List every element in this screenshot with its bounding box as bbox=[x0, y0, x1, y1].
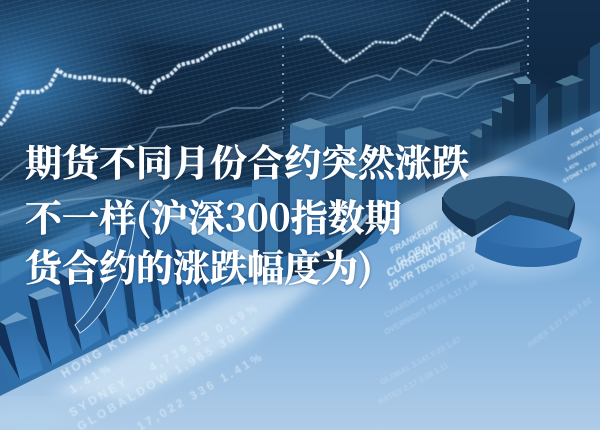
pie main top face bbox=[443, 176, 575, 220]
title line 2: 不一样(沪深300指数期 bbox=[25, 188, 402, 242]
floor ticker text: ASIA bbox=[570, 126, 584, 138]
floor ticker text: CHARDAYS RT.16 1.32 0.17 bbox=[383, 262, 477, 320]
floor ticker text: 1.41% bbox=[564, 161, 581, 174]
title bbox=[25, 133, 572, 292]
floor ticker text: 4,739 33 0.69% bbox=[146, 300, 262, 375]
pie chart bbox=[442, 176, 582, 267]
bar 7 bbox=[170, 233, 200, 303]
bar 6 bbox=[143, 222, 177, 315]
floor ticker text: OVERNIGHT RATE 5.17 1.00 bbox=[383, 278, 480, 337]
bar 0 bbox=[0, 350, 10, 393]
bar 4 bbox=[83, 233, 128, 337]
volume ticks band bbox=[0, 62, 520, 226]
floor ticker text: 10-YR TBOND 3.37 bbox=[386, 240, 469, 293]
floor ticker text: 1.41% bbox=[66, 360, 116, 397]
light floor plane bbox=[0, 111, 600, 430]
floor ticker text: HONG KONG 20,771 bbox=[58, 287, 206, 381]
bar 8 bbox=[193, 243, 222, 293]
floor ticker text: SYDNEY bbox=[66, 374, 131, 420]
right staircase bars bbox=[470, 42, 600, 178]
floor ticker text: GLOBALDOW bbox=[394, 225, 458, 269]
pie detached slice side bbox=[475, 238, 582, 267]
bar 1 bbox=[0, 312, 43, 380]
decorative dotted scale lines bbox=[283, 0, 528, 130]
line chart: bright upper price line bbox=[0, 0, 510, 125]
middle row of bars bbox=[233, 118, 450, 280]
title line 3: 货合约的涨跌幅度为) bbox=[25, 238, 373, 292]
floor ticker text: FRANKFURT bbox=[388, 219, 442, 256]
pie outer side wall bbox=[442, 197, 575, 237]
pie inner wedge wall bbox=[475, 201, 568, 235]
title line 1: 期货不同月份合约突然涨跌 bbox=[25, 133, 469, 187]
dark disc behind title bbox=[290, 208, 388, 276]
floor ticker text: GLOBAL 3.141 0.22 1.47 bbox=[379, 335, 463, 387]
left blue 3D bar chart bbox=[0, 222, 222, 393]
rising curved ribbon arrow bbox=[75, 200, 255, 333]
bar 2 bbox=[28, 287, 73, 365]
bar 3 bbox=[58, 265, 102, 351]
line chart: thin secondary lines bbox=[0, 40, 523, 215]
floor ticker text: RATES 2.17 3.08 1.11 bbox=[377, 361, 451, 407]
floor ticker text: INDEX 3.27 1.55 7.02 bbox=[526, 295, 594, 350]
pie slice top face bbox=[477, 215, 582, 248]
blue band behind left bars bbox=[0, 170, 400, 396]
floor ticker text bbox=[58, 126, 600, 430]
floor ticker text: CURRENCY RATES bbox=[385, 220, 479, 280]
floor ticker text: SYDNEY 4,739 bbox=[562, 161, 598, 185]
bar 5 bbox=[115, 222, 154, 326]
